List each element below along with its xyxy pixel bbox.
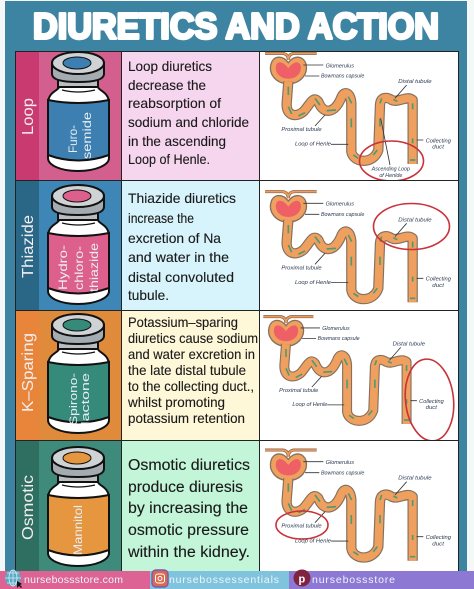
- text: k-sparing description: to the collecting duct.,: [128, 378, 254, 394]
- icon: furosemide vial: Furo-: [66, 125, 80, 153]
- diagram: nephron, collecting duct highlighted: Distal tubule: [393, 341, 425, 347]
- label: K-Sparing: K–Sparing: [20, 333, 37, 412]
- panel: k-sparing row: [15, 310, 459, 443]
- diagram: nephron, ascending loop highlighted: Distal tubule: [398, 79, 432, 85]
- diagram: nephron, distal tubule highlighted: Distal tubule: [398, 217, 432, 223]
- text: website: nursebossstore.com: [24, 574, 123, 586]
- diagram: nephron, collecting duct highlighted: Proximal tubule: [279, 388, 318, 394]
- text: loop description: Loop diuretics: [128, 58, 212, 74]
- diagram: nephron, distal tubule highlighted: Collecting: [426, 277, 452, 283]
- icon: mannitol vial: Mannitol: [71, 505, 85, 555]
- diagram: nephron, proximal tubule highlighted: Distal tubule: [398, 476, 432, 482]
- label: Loop: Loop: [20, 98, 37, 135]
- label: Thiazide: Thiazide: [20, 215, 37, 278]
- text: loop description: sodium and chloride: [128, 114, 249, 130]
- text: thiazide description: distal convoluted: [128, 269, 234, 285]
- diagram: nephron, proximal tubule highlighted: Bowmans capsule: [321, 470, 364, 476]
- icon: mannitol vial: [48, 447, 109, 566]
- title: DIURETICS AND ACTION: [33, 6, 439, 46]
- diagram: nephron, distal tubule highlighted: Proximal tubule: [281, 265, 322, 271]
- icon: hydrochlorothiazide vial: Hydro-: [56, 245, 70, 290]
- text: osmotic description: produce diuresis: [128, 479, 243, 496]
- diagram: nephron, ascending loop highlighted: Loop of Henle: [295, 142, 331, 148]
- icon: hydrochlorothiazide vial: [48, 185, 109, 304]
- text: loop description: Loop of Henle.: [128, 151, 210, 167]
- text: k-sparing description: [127, 314, 258, 426]
- text: thiazide description: tubule.: [128, 287, 169, 303]
- diagram: nephron, ascending loop highlighted: [265, 53, 452, 179]
- text: k-sparing description: whilst promoting: [127, 394, 225, 410]
- diagram: nephron, ascending loop highlighted: duct: [432, 145, 444, 151]
- diagram: nephron, ascending loop highlighted: Bowmans capsule: [321, 74, 364, 80]
- diagram: nephron, collecting duct highlighted: duct: [426, 405, 437, 411]
- icon: spironolactone vial: lactone: [80, 373, 92, 425]
- icon: hydrochlorothiazide vial: thiazide: [87, 243, 101, 292]
- diagram: nephron, collecting duct highlighted: [263, 317, 444, 424]
- footer: [0, 570, 474, 589]
- panel: thiazide row: [15, 180, 459, 311]
- callout: red circle: [374, 204, 450, 250]
- text: thiazide description: excretion of Na: [128, 230, 221, 246]
- callout: red circle: [360, 141, 424, 181]
- icon: pinterest: p: [298, 574, 306, 586]
- icon: furosemide vial: semide: [80, 112, 94, 159]
- text: loop description: in the ascending: [128, 133, 226, 149]
- diagram: nephron, ascending loop highlighted: Ascending Loop: [371, 167, 410, 173]
- icon: pinterest: [294, 570, 310, 586]
- icon: instagram: [152, 570, 168, 587]
- diagram: nephron, distal tubule highlighted: duct: [432, 283, 444, 289]
- diagram: nephron, proximal tubule highlighted: Collecting: [426, 535, 452, 541]
- diagram: nephron, distal tubule highlighted: Glomerulus: [326, 202, 354, 208]
- icon: furosemide vial: [48, 52, 109, 171]
- text: instagram handle: nursebossessentials: [169, 574, 279, 586]
- diagram: nephron, ascending loop highlighted: Proximal tubule: [281, 127, 322, 133]
- text: loop description: [128, 58, 249, 167]
- icon: spironolactone vial: [48, 314, 109, 433]
- text: osmotic description: osmotic pressure: [128, 522, 249, 539]
- text: osmotic description: [127, 457, 250, 561]
- diagram: nephron, proximal tubule highlighted: duct: [432, 541, 444, 547]
- icon: globe: [5, 570, 22, 588]
- diagram: nephron, distal tubule highlighted: Bowmans capsule: [321, 212, 364, 218]
- text: k-sparing description: potassium retention: [128, 410, 245, 426]
- panel: loop row: [15, 51, 459, 181]
- text: k-sparing description: the late distal tubule: [128, 362, 246, 378]
- text: thiazide description: and water in the: [128, 249, 229, 265]
- text: osmotic description: within the kidney.: [127, 544, 250, 561]
- text: k-sparing description: diuretics cause sodium: [128, 330, 258, 346]
- icon: hydrochlorothiazide vial: chloro-: [72, 246, 86, 290]
- diagram: nephron, ascending loop highlighted: Collecting: [426, 138, 452, 144]
- callout: red circle: [401, 357, 458, 443]
- diagram: nephron, collecting duct highlighted: Bowmans capsule: [318, 336, 360, 342]
- diagram: nephron, collecting duct highlighted: Collecting: [419, 399, 444, 405]
- text: osmotic description: Osmotic diuretics: [128, 457, 250, 474]
- diagram: nephron, proximal tubule highlighted: Proximal tubule: [281, 524, 322, 530]
- diagram: nephron, collecting duct highlighted: Loop of Henle: [292, 402, 327, 408]
- text: osmotic description: by increasing the: [128, 500, 248, 517]
- diagram: nephron, ascending loop highlighted: of Henlde: [379, 173, 402, 179]
- text: k-sparing description: and water excretion in: [128, 346, 255, 362]
- callout: red circle: [276, 511, 328, 539]
- text: thiazide description: Thiazide diuretics: [128, 190, 236, 206]
- diagram: nephron, proximal tubule highlighted: Glomerulus: [326, 460, 354, 466]
- panel: osmotic row: [15, 440, 459, 571]
- icon: spironolactone vial: Spirono-: [68, 373, 80, 425]
- text: loop description: decrease the: [128, 77, 206, 93]
- diagram: nephron, distal tubule highlighted: [265, 192, 452, 302]
- diagram: nephron, ascending loop highlighted: Glomerulus: [326, 63, 354, 69]
- diagram: nephron, proximal tubule highlighted: Loop of Henle: [295, 538, 331, 544]
- diagram: nephron, collecting duct highlighted: Glomerulus: [322, 326, 350, 332]
- diagram: nephron, proximal tubule highlighted: [265, 450, 452, 561]
- text: k-sparing description: Potassium–sparing: [128, 314, 238, 330]
- label: Osmotic: Osmotic: [20, 475, 37, 540]
- text: pinterest handle: nursebossstore: [312, 574, 395, 586]
- text: thiazide description: increase the: [128, 210, 194, 226]
- diagram: nephron, distal tubule highlighted: Loop of Henle: [295, 280, 331, 286]
- text: loop description: reabsorption of: [128, 95, 221, 111]
- text: thiazide description: [128, 190, 236, 303]
